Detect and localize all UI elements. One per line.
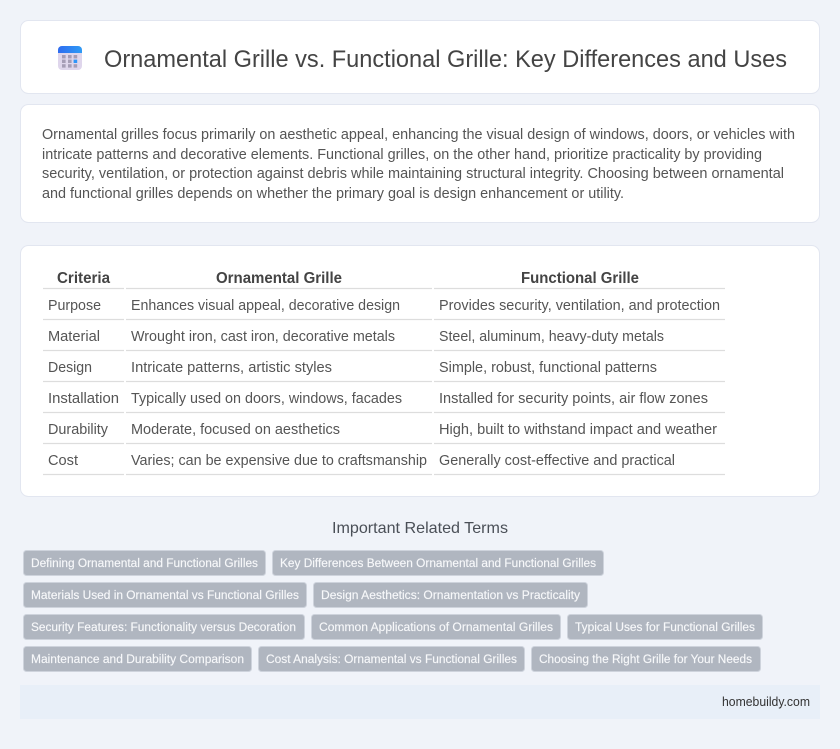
table row: cost (48, 453, 675, 469)
table row: material: Steel, aluminum, heavy-duty metals (439, 329, 664, 345)
tag (314, 582, 588, 608)
table row: material (48, 329, 664, 345)
table row: design: Simple, robust, functional patterns (439, 360, 657, 376)
text block: introduction paragraph (42, 127, 795, 202)
tag list: related terms (24, 550, 762, 672)
table row: durability: Durability (48, 422, 109, 438)
text block: introduction paragraph: and functional grilles depends on whether the primary goal is design enhancement or utility. (42, 186, 624, 202)
tag (24, 582, 306, 608)
footer: site name: homebuildy.com (722, 694, 810, 709)
tag: Cost Analysis: Ornamental vs Functional Grilles (266, 652, 517, 666)
table header row (57, 270, 639, 287)
table row: purpose: Provides security, ventilation, and protection (439, 298, 720, 314)
table row: design (48, 360, 657, 376)
footer (20, 685, 820, 719)
tag (258, 646, 524, 672)
table row: cost: Varies; can be expensive due to craftsmanship (131, 453, 427, 469)
heading: important related terms: Important Related Terms (332, 520, 508, 537)
table row: cost: Cost (48, 453, 78, 469)
table row: purpose (48, 298, 720, 314)
panel: title header (20, 20, 820, 94)
table header row: Criteria (57, 270, 110, 287)
tag: Maintenance and Durability Comparison (31, 652, 244, 666)
table row: installation: Installed for security points, air flow zones (439, 391, 708, 407)
tag (24, 614, 304, 640)
tag (532, 646, 760, 672)
table header row: Ornamental Grille (216, 270, 342, 287)
table row: durability: High, built to withstand impact and weather (439, 422, 717, 438)
panel: introduction (20, 104, 820, 222)
panel: comparison table (20, 246, 820, 496)
tag: Key Differences Between Ornamental and Functional Grilles (280, 556, 596, 570)
tag: Materials Used in Ornamental vs Functional Grilles (31, 588, 299, 602)
tag: Defining Ornamental and Functional Grilles (31, 556, 258, 570)
icon: calendar (58, 46, 82, 70)
table row: installation: Typically used on doors, windows, facades (131, 391, 402, 407)
table row: cost: Generally cost-effective and practical (439, 453, 675, 469)
tag: Design Aesthetics: Ornamentation vs Practicality (321, 588, 581, 602)
table row: durability (48, 422, 717, 438)
table row: installation: Installation (48, 391, 119, 407)
text block: introduction paragraph: intricate patterns and decorative elements. Functional grilles, on the other hand, prioritize practicality by providing (42, 147, 762, 163)
table row: design: Intricate patterns, artistic styles (131, 360, 332, 376)
tag: Typical Uses for Functional Grilles (575, 620, 755, 634)
table row: material: Wrought iron, cast iron, decorative metals (131, 329, 395, 345)
table row: installation (48, 391, 708, 407)
text block: introduction paragraph: Ornamental grilles focus primarily on aesthetic appeal, enhancing the visual design of windows, doors, or vehicles with (42, 127, 795, 143)
text block: introduction paragraph: security, ventilation, or protection against debris while maintaining structural integrity. Choosing between ornamental (42, 166, 784, 182)
tag: Common Applications of Ornamental Grilles (319, 620, 553, 634)
tag: Choosing the Right Grille for Your Needs (539, 652, 752, 666)
table row: durability: Moderate, focused on aesthetics (131, 422, 340, 438)
table row: purpose: Enhances visual appeal, decorative design (131, 298, 400, 314)
tag (568, 614, 762, 640)
table row: material: Material (48, 329, 100, 345)
table row: purpose: Purpose (48, 298, 101, 314)
title: Ornamental Grille vs. Functional Grille: Key Differences and Uses (104, 46, 787, 73)
tag: Security Features: Functionality versus Decoration (31, 620, 296, 634)
tag (272, 550, 604, 576)
tag (24, 550, 266, 576)
table row: design: Design (48, 360, 92, 376)
table header row: Functional Grille (521, 270, 639, 287)
tag (312, 614, 560, 640)
tag (24, 646, 252, 672)
